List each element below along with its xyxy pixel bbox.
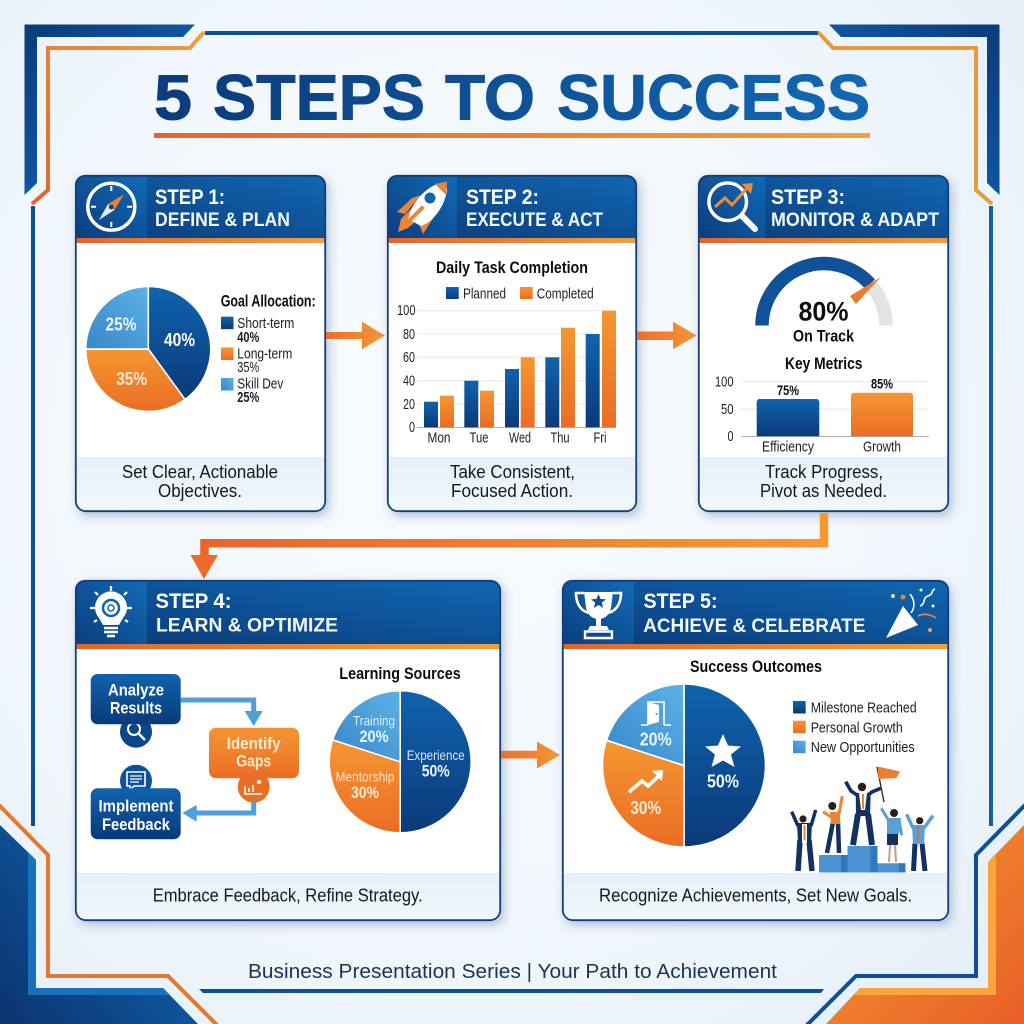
icon: door [641, 702, 671, 725]
legend: Short-term [237, 316, 294, 332]
arrow: step 3 to step 4 [204, 513, 824, 556]
pie chart: learning sources: Training [353, 713, 395, 729]
legend: Goal Allocation: [221, 292, 316, 310]
flow: identify gaps [209, 728, 299, 803]
caption: Embrace Feedback, Refine Strategy. [153, 886, 423, 906]
flow arrow: analyze to identify [181, 700, 263, 726]
caption: Set Clear, Actionable [122, 462, 278, 482]
caption: Focused Action. [451, 481, 573, 501]
pie chart: success outcomes: 30% [630, 798, 661, 818]
pie chart: success outcomes: 50% [707, 772, 739, 792]
pie chart: goal allocation: 35% [116, 369, 147, 389]
pie chart: learning sources: Mentorship [336, 769, 395, 785]
heading [156, 590, 338, 637]
title: STEPS [213, 62, 425, 134]
legend: Long-term [237, 347, 292, 363]
illustration: team celebrating on podium [792, 766, 933, 872]
icon: party popper [886, 588, 936, 638]
bar chart: daily task completion: 60 [403, 350, 415, 366]
pie chart: goal allocation: 40% [164, 330, 195, 350]
bar chart: daily task completion: 20 [403, 397, 415, 413]
heading: STEP 3: [771, 186, 845, 209]
arrowhead: into step 4 [190, 555, 218, 579]
icon: magnifier with trend [709, 183, 755, 229]
bar chart: key metrics [715, 355, 929, 456]
panel: step 3 [698, 175, 949, 512]
legend: 25% [237, 390, 259, 406]
bar chart: key metrics: 50 [721, 402, 734, 418]
heading: EXECUTE & ACT [466, 210, 603, 231]
caption: Take Consistent, [450, 462, 575, 482]
bar chart: key metrics: 0 [728, 429, 734, 445]
panel: step 1 [75, 175, 326, 512]
chart legend: Planned [463, 286, 506, 302]
legend: Skill Dev [237, 377, 284, 393]
flow: analyze results: Analyze [108, 681, 164, 700]
gauge: 80% on track [762, 264, 886, 346]
bar chart: daily task completion: Fri [594, 431, 606, 447]
flow: identify gaps: Identify [227, 734, 281, 753]
bar chart: key metrics: 85% [871, 376, 893, 391]
panel: step 5 [562, 580, 949, 921]
icon: rocket [397, 182, 447, 234]
chart legend [446, 286, 594, 302]
heading: DEFINE & PLAN [155, 210, 290, 231]
bar chart: key metrics: Key Metrics [785, 355, 862, 373]
icon: lightbulb with gear [90, 586, 132, 636]
heading: MONITOR & ADAPT [771, 210, 939, 231]
legend: Personal Growth [811, 720, 903, 736]
bar chart: daily task completion: Wed [509, 431, 531, 447]
heading: STEP 4: [156, 590, 232, 613]
bar chart: daily task completion: Thu [550, 431, 570, 447]
pie chart: learning sources: 50% [422, 762, 450, 781]
legend: 35% [237, 360, 259, 376]
title underline [154, 133, 870, 138]
bar chart: daily task completion: 0 [409, 420, 415, 436]
bar chart: daily task completion: 80 [403, 327, 415, 343]
pie chart: learning sources: 30% [351, 783, 379, 802]
flow arrow: identify to implement [182, 802, 254, 822]
legend: Milestone Reached [811, 700, 917, 716]
caption [122, 462, 278, 501]
caption [450, 462, 575, 501]
title [154, 62, 870, 134]
legend: New Opportunities [811, 740, 915, 756]
flow: implement feedback: Feedback [102, 815, 170, 834]
heading [643, 590, 865, 637]
icon: growth arrow [629, 770, 663, 792]
icon: trophy [576, 592, 621, 638]
chart title: Success Outcomes [690, 657, 822, 676]
flow: identify gaps: Gaps [236, 752, 271, 771]
bar chart: daily task completion: Mon [428, 431, 450, 447]
caption: Pivot as Needed. [760, 481, 887, 501]
bar chart: key metrics: 75% [777, 383, 799, 398]
bar chart: daily task completion: Tue [470, 431, 488, 447]
chart legend: Completed [537, 286, 594, 302]
heading [466, 186, 603, 231]
pie chart: success outcomes [603, 684, 766, 847]
gauge: 80% on track: On Track [793, 327, 854, 346]
title: SUCCESS [557, 62, 870, 134]
legend [221, 292, 316, 406]
panel: step 2 [387, 175, 637, 512]
flow: implement feedback: Implement [98, 797, 174, 816]
arrow: step 2 to step 3 [637, 322, 697, 349]
pie chart: learning sources: Learning Sources [339, 664, 461, 683]
caption: Objectives. [158, 481, 242, 501]
caption [760, 462, 887, 501]
bar chart: daily task completion: Daily Task Completion [436, 259, 588, 277]
pie chart: goal allocation: 25% [106, 314, 136, 334]
icon: star [705, 734, 741, 767]
heading: STEP 1: [155, 186, 225, 209]
pie chart: success outcomes: 20% [640, 730, 672, 750]
gauge: 80% on track: 80% [798, 296, 848, 326]
pie chart: goal allocation [86, 286, 211, 411]
flow: implement feedback [91, 765, 181, 839]
heading [771, 186, 939, 231]
panel: step 4 [75, 580, 501, 921]
footer tagline: Business Presentation Series | Your Path to Achievement [248, 961, 777, 983]
heading: STEP 5: [644, 590, 718, 613]
bar chart: daily task completion: 40 [403, 374, 415, 390]
bar chart: key metrics: Efficiency [762, 440, 815, 456]
arrow: step 1 to step 2 [326, 322, 385, 349]
arrow: step 4 to step 5 [501, 742, 560, 768]
bar chart: key metrics: 100 [715, 374, 734, 390]
caption: Recognize Achievements, Set New Goals. [599, 886, 912, 906]
legend [793, 700, 917, 756]
title: TO [445, 62, 535, 134]
pie chart: learning sources: Experience [407, 747, 465, 763]
bar chart: daily task completion [397, 259, 616, 447]
heading: ACHIEVE & CELEBRATE [643, 616, 865, 637]
title: 5 [154, 62, 192, 134]
heading: STEP 2: [466, 186, 539, 209]
caption: Track Progress, [765, 462, 883, 482]
flow: analyze results [91, 674, 181, 748]
flow: analyze results: Results [110, 698, 162, 717]
pie chart: learning sources [329, 664, 471, 833]
icon: compass [88, 183, 135, 230]
heading: LEARN & OPTIMIZE [156, 616, 338, 637]
legend: 40% [237, 330, 259, 346]
bar chart: key metrics: Growth [863, 440, 901, 456]
heading [155, 186, 290, 231]
bar chart: daily task completion: 100 [397, 303, 416, 319]
pie chart: learning sources: 20% [360, 727, 388, 746]
